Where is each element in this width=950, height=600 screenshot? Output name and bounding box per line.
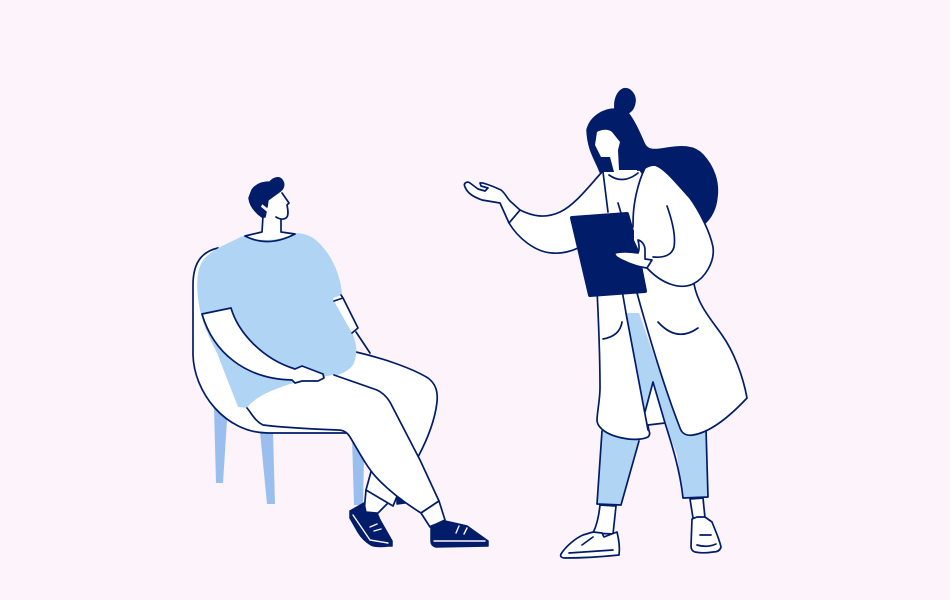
lab coat edge outline <box>637 284 747 435</box>
chair legs <box>214 408 364 505</box>
trouser right lower leg outline <box>665 423 708 498</box>
near trouser leg <box>247 375 439 513</box>
coat front edge and sleeve outline <box>633 165 713 286</box>
trouser right lower leg <box>665 423 708 498</box>
far arm <box>333 295 370 353</box>
trousers far thigh <box>330 351 437 470</box>
left shoe <box>561 532 619 558</box>
collar and neck <box>245 216 295 242</box>
long hair <box>587 89 717 224</box>
left foot <box>593 505 616 534</box>
trouser left lower leg <box>597 428 640 505</box>
centre lines <box>622 290 665 430</box>
back leg and shoe <box>350 468 405 547</box>
near arm and hand <box>202 308 324 383</box>
gap panel <box>645 382 665 425</box>
face <box>266 193 289 219</box>
lab coat lower left panel outline <box>597 290 650 439</box>
chair seat <box>193 248 352 433</box>
shirt <box>603 170 637 228</box>
coat pockets <box>603 322 698 339</box>
gesturing arm fill <box>509 172 606 253</box>
hair <box>249 178 284 217</box>
right shoe <box>691 517 721 553</box>
trouser left lower leg outline <box>597 431 639 505</box>
face and neck <box>595 130 638 176</box>
coat lapel lines <box>588 172 621 213</box>
clipboard <box>572 214 645 295</box>
collar <box>609 173 638 180</box>
centre trouser panel <box>626 313 680 430</box>
right foot <box>690 498 705 518</box>
face outline <box>276 193 289 219</box>
holding hand <box>615 240 652 268</box>
lab coat lower left panel <box>597 290 650 439</box>
shirt gap white <box>622 290 640 313</box>
gesturing arm outline <box>509 172 602 253</box>
gesturing hand <box>464 182 520 223</box>
near foot <box>421 501 445 527</box>
sleeve fold <box>653 206 675 257</box>
figure: seated patient <box>193 178 488 547</box>
near shoe <box>431 521 488 547</box>
figure: doctor <box>464 89 747 558</box>
coat sleeve <box>634 165 713 286</box>
lab coat torso and right panel <box>633 168 747 435</box>
t-shirt <box>197 233 356 408</box>
